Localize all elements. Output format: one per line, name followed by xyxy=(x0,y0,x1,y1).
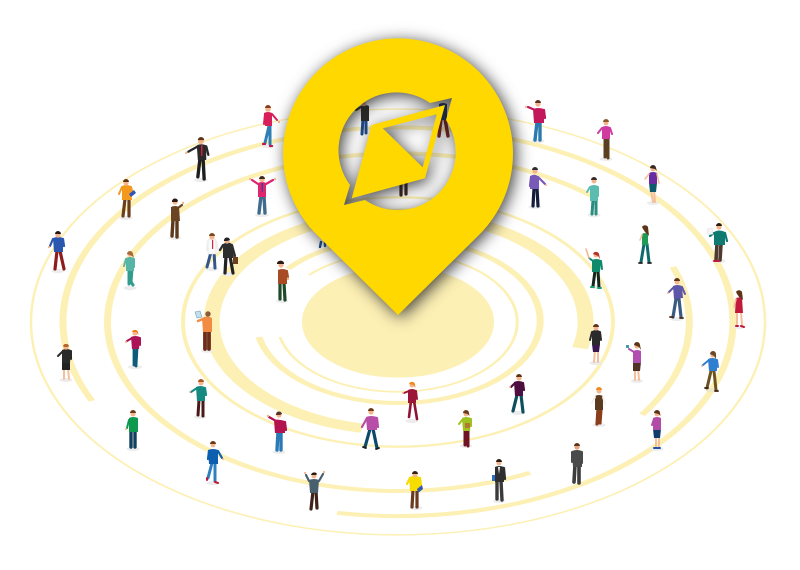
person 22 maroon suit female xyxy=(402,382,418,423)
ring 7 outer xyxy=(31,109,765,535)
person 38 violet shirt xyxy=(528,167,547,209)
person 30 black jacket purple skirt xyxy=(590,324,602,365)
person 9 light teal xyxy=(124,251,136,290)
person 4 brown suit xyxy=(169,198,184,240)
people xyxy=(48,100,745,510)
person 17 purple walking xyxy=(362,408,379,449)
person 40 crimson blue jeans xyxy=(525,100,545,143)
person 12 crimson top orange hair xyxy=(125,330,142,369)
person 36 purple top teal skirt xyxy=(645,165,659,205)
person 29 orchid with phone xyxy=(626,342,643,383)
person 13 black suit skirt xyxy=(58,344,72,382)
location pin with compass xyxy=(283,38,513,315)
person 39 magenta top xyxy=(598,119,612,161)
person 20 yellow with book xyxy=(407,471,423,510)
person 27 purple with navy skirt xyxy=(650,410,664,451)
person 31 indigo shirt xyxy=(667,278,685,321)
person 21 black suit xyxy=(492,459,505,503)
person 24 dark purple xyxy=(509,374,525,415)
person 25 dark gray suit xyxy=(572,443,582,483)
person 18 blue walking xyxy=(206,441,224,485)
ring 5 long arc xyxy=(108,153,592,491)
ring 5 right arc xyxy=(642,267,689,415)
person 2 black suit xyxy=(185,137,208,182)
person 33 teal with paper xyxy=(707,223,727,263)
pin body with cut-out xyxy=(283,38,513,315)
person 26 brown vest xyxy=(592,387,606,427)
ring 6 xyxy=(63,127,733,516)
person 10 rust shirt xyxy=(276,261,289,303)
ring 1 xyxy=(280,253,517,392)
person 42 navy and dark red in pin window xyxy=(439,103,448,136)
person 44 mostly hidden by pin xyxy=(320,242,325,247)
person 41 black jacket in pin window xyxy=(356,102,369,134)
compass needle xyxy=(352,105,445,198)
person 8 blue shirt xyxy=(48,231,64,273)
person 11 orange with tablet xyxy=(195,311,213,353)
person 35 green arm raised xyxy=(586,249,602,289)
person 28 blue walking xyxy=(701,351,718,392)
person 37 aqua shirt xyxy=(587,177,600,217)
person 5 magenta arms raised xyxy=(249,176,276,217)
person 43 legs in pin window xyxy=(401,175,406,195)
central ellipse xyxy=(302,266,494,378)
person 34 green top teal pants xyxy=(639,225,651,263)
person 14 teal shirt xyxy=(189,379,206,419)
concentric rings xyxy=(31,109,765,535)
ring 3 thick xyxy=(212,213,586,428)
person 23 lime shirt xyxy=(459,410,472,448)
person 32 red dress xyxy=(733,290,745,329)
person 15 green shirt xyxy=(125,410,140,451)
ring 2 xyxy=(259,238,540,403)
person 6 white shirt xyxy=(206,233,218,271)
person 16 crimson blue jeans xyxy=(267,411,286,454)
person 3 orange shirt with book xyxy=(119,179,136,220)
person 1 crimson jacket xyxy=(262,105,280,148)
person 7 black suit with briefcase xyxy=(220,237,238,276)
ring 4 xyxy=(183,197,613,447)
person 19 slate arms raised xyxy=(304,471,325,509)
